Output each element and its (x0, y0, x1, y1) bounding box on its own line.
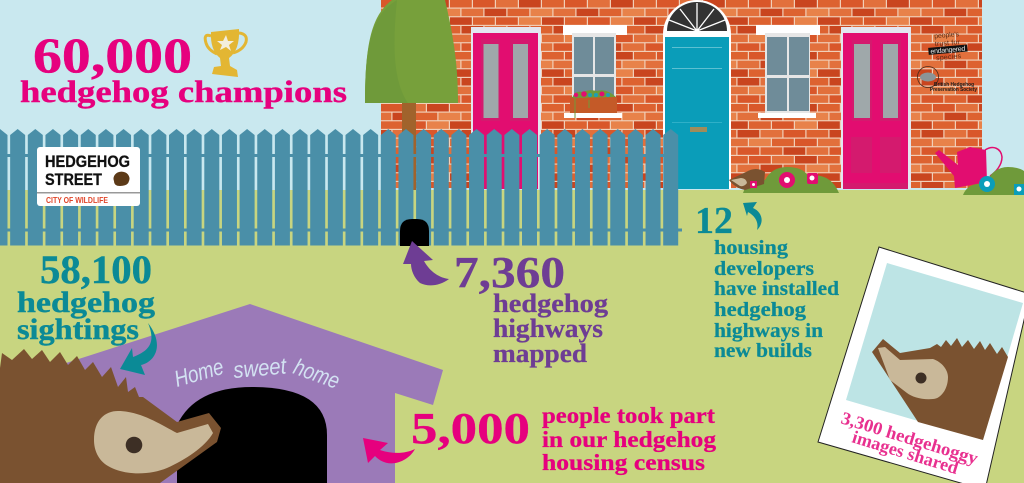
arrow: purple to hole (403, 241, 449, 285)
arrow: teal to hedgehog (120, 323, 157, 375)
bush with hedgehog and flowers by door (729, 167, 839, 193)
stat: 12 housing developers (695, 200, 840, 362)
right window (756, 25, 820, 118)
logo: people's trust for endangered species: people's (934, 31, 960, 40)
heading: 60,000 hedgehog champions: 60,000 (33, 27, 192, 83)
arrow: teal to developers' houses (743, 202, 762, 230)
stat: 12 housing developers: housing (714, 237, 789, 259)
heading: 60,000 hedgehog champions: hedgehog champions (20, 74, 347, 109)
street sign: Hedgehog Street: STREET (45, 170, 103, 189)
stat: 12 housing developers: highways in (714, 320, 824, 342)
large hedgehog (0, 349, 221, 483)
logo: people's trust for endangered species (927, 31, 968, 63)
left pink door (471, 27, 541, 189)
stat: 5,000 housing census: 5,000 (411, 404, 530, 453)
heading: 60,000 hedgehog champions (20, 27, 347, 109)
purple hedgehog home (60, 304, 443, 483)
stat: 5,000 housing census (411, 403, 716, 476)
stat: 12 housing developers: hedgehog (714, 299, 807, 321)
stat: 7,360 highways mapped: 7,360 (454, 248, 565, 297)
logo: people's trust for endangered species: trust for (935, 39, 961, 48)
handwritten label: Home sweet home: Home (171, 353, 226, 392)
logo: people's trust for endangered species: endangered (930, 46, 966, 56)
right pink door (841, 27, 911, 189)
logo: British Hedgehog Preservation Society: Preservation Society (930, 87, 977, 93)
stat: 7,360 highways mapped: highways (493, 314, 603, 343)
bush with flowers on right (963, 167, 1024, 195)
handwritten label: Home sweet home: sweet (232, 352, 289, 383)
stat: 12 housing developers: developers (714, 258, 814, 280)
hedgehog hole in fence (400, 219, 429, 246)
picket fence (0, 129, 682, 246)
stat: 5,000 housing census: in our hedgehog (542, 427, 716, 453)
street sign: Hedgehog Street: HEDGEHOG (45, 152, 130, 171)
stat: 58,100 hedgehog sightings: hedgehog (17, 286, 155, 319)
stat: 58,100 hedgehog sightings (17, 247, 155, 346)
left window with flower box (563, 25, 627, 118)
icon: gold trophy (205, 29, 246, 77)
polaroid photo: images shared (850, 427, 961, 478)
logo: people's trust for endangered species: species (936, 53, 962, 62)
street sign: Hedgehog Street (37, 147, 140, 206)
stat: 12 housing developers: have installed (714, 278, 840, 300)
stat: 12 housing developers: new builds (714, 340, 812, 362)
handwritten label: Home sweet home: home (290, 353, 343, 394)
stat: 5,000 housing census: people took part (542, 403, 715, 429)
ground (0, 190, 1024, 483)
arrow: pink to house (363, 438, 415, 463)
sky background (0, 0, 1024, 190)
stat: 7,360 highways mapped: mapped (493, 339, 588, 368)
logo: British Hedgehog Preservation Society (918, 66, 977, 93)
watering can (935, 147, 1002, 188)
logo: British Hedgehog Preservation Society: British Hedgehog (934, 82, 974, 88)
stat: 58,100 hedgehog sightings: sightings (17, 313, 139, 346)
stat: 58,100 hedgehog sightings: 58,100 (40, 247, 152, 292)
brick house wall (381, 0, 982, 188)
handwritten label: Home sweet home (171, 352, 343, 394)
tree (365, 0, 458, 190)
street sign: Hedgehog Street: CITY OF WILDLIFE (46, 195, 108, 205)
stat: 5,000 housing census: housing census (542, 450, 705, 476)
stat: 7,360 highways mapped (454, 248, 608, 368)
stat: 7,360 highways mapped: hedgehog (493, 289, 608, 318)
stat: 12 housing developers: 12 (695, 200, 733, 242)
polaroid photo: 3,300 hedgehoggy (839, 408, 980, 468)
teal front door with fanlight (663, 0, 731, 189)
polaroid photo (818, 247, 1024, 483)
